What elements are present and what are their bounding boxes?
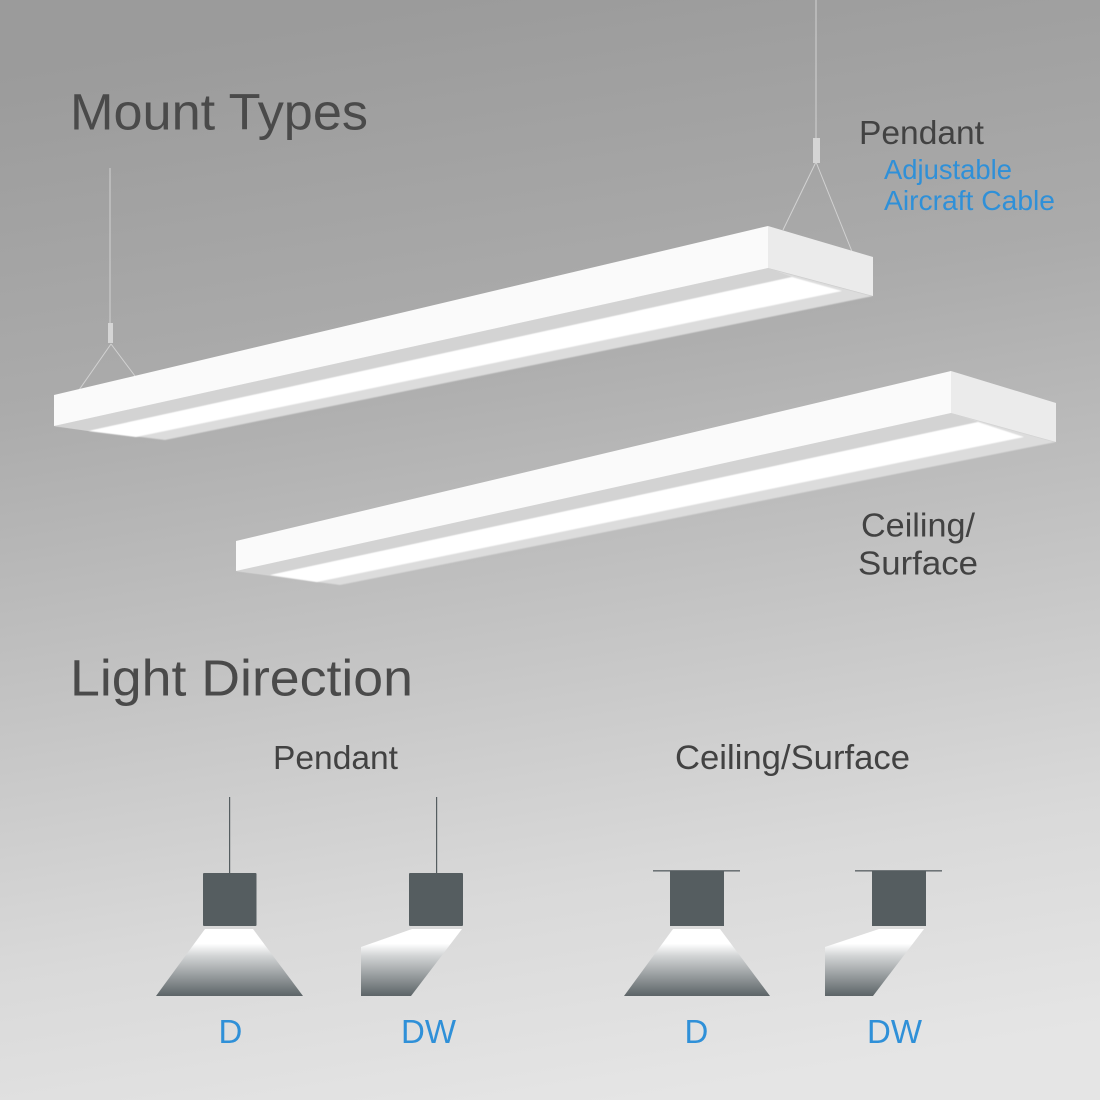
label: Adjustable Aircraft Cable bbox=[884, 154, 1055, 216]
label: Ceiling/Surface: Surface bbox=[858, 546, 978, 582]
front face bbox=[236, 371, 951, 571]
label: Ceiling/Surface bbox=[858, 508, 978, 582]
light panel bbox=[88, 277, 842, 437]
heading: Ceiling/Surface: Ceiling/Surface bbox=[675, 739, 910, 777]
label: Adjustable Aircraft Cable: Aircraft Cable bbox=[884, 185, 1055, 216]
heading: Pendant: Pendant bbox=[273, 740, 399, 777]
icon: pendant direct bbox=[156, 797, 303, 996]
title: Light Direction: Light Direction bbox=[70, 650, 413, 706]
light panel bbox=[270, 422, 1024, 582]
label: D: D bbox=[218, 1013, 242, 1050]
pendant fixture bbox=[54, 0, 873, 440]
end face bbox=[768, 226, 873, 296]
label: DW: DW bbox=[867, 1013, 923, 1050]
fixture underside bbox=[236, 413, 1056, 585]
icon: surface direct bbox=[624, 870, 770, 996]
label: Adjustable Aircraft Cable: Adjustable bbox=[884, 154, 1012, 185]
title: Mount Types: Mount Types bbox=[70, 84, 368, 140]
label: Ceiling/Surface: Ceiling/ bbox=[861, 508, 976, 544]
ceiling fixture bbox=[236, 371, 1056, 585]
front face bbox=[54, 226, 768, 426]
pendant cables right bbox=[783, 0, 853, 254]
recess shadow bbox=[54, 268, 792, 431]
icon: surface direct/wall bbox=[825, 870, 942, 996]
label: D: D bbox=[684, 1013, 708, 1050]
icon: pendant direct/wall bbox=[361, 797, 463, 996]
recess shadow bbox=[236, 413, 978, 575]
end face bbox=[951, 371, 1056, 442]
label: DW: DW bbox=[401, 1013, 457, 1050]
label: Pendant: Pendant bbox=[859, 115, 985, 152]
pendant cables left bbox=[79, 168, 135, 390]
fixture underside bbox=[54, 268, 873, 440]
